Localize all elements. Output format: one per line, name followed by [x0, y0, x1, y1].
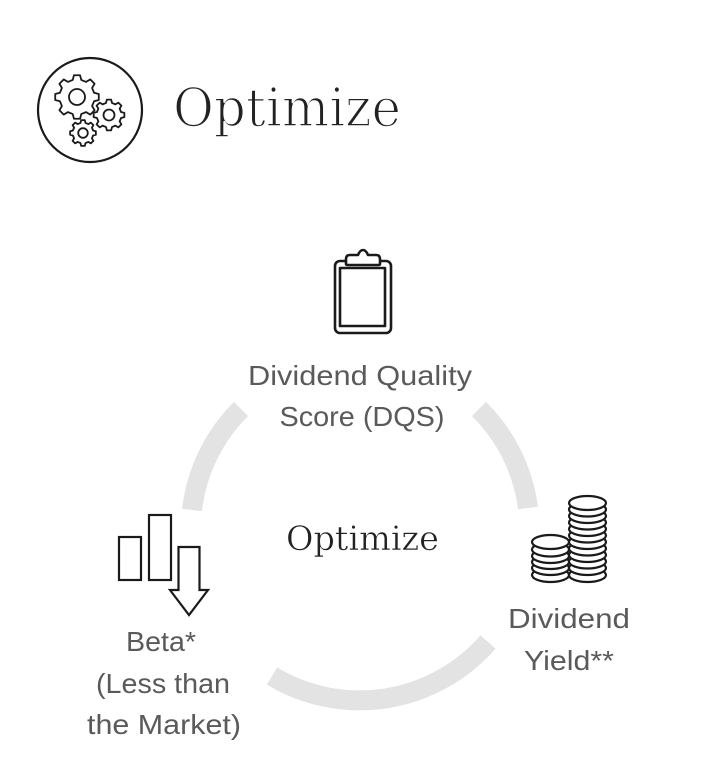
center label: Optimize — [286, 519, 439, 559]
title: Optimize — [173, 78, 401, 139]
label: dividend yield: Yield** — [524, 645, 614, 676]
label: dividend quality score — [248, 360, 472, 432]
label: beta — [87, 626, 241, 740]
label: dividend yield — [508, 603, 630, 676]
icon: coin stacks — [532, 496, 606, 582]
ring of three arcs — [192, 409, 528, 700]
label: beta: Beta* — [126, 626, 196, 657]
icon: clipboard — [335, 250, 391, 333]
icon: bars with down arrow — [119, 515, 208, 615]
label: beta: (Less than — [96, 668, 230, 699]
label: dividend yield: Dividend — [508, 603, 630, 634]
label: dividend quality score: Score (DQS) — [280, 401, 444, 432]
icon: gears in circle — [38, 58, 142, 162]
label: dividend quality score: Dividend Quality — [248, 360, 472, 391]
label: beta: the Market) — [87, 709, 241, 740]
